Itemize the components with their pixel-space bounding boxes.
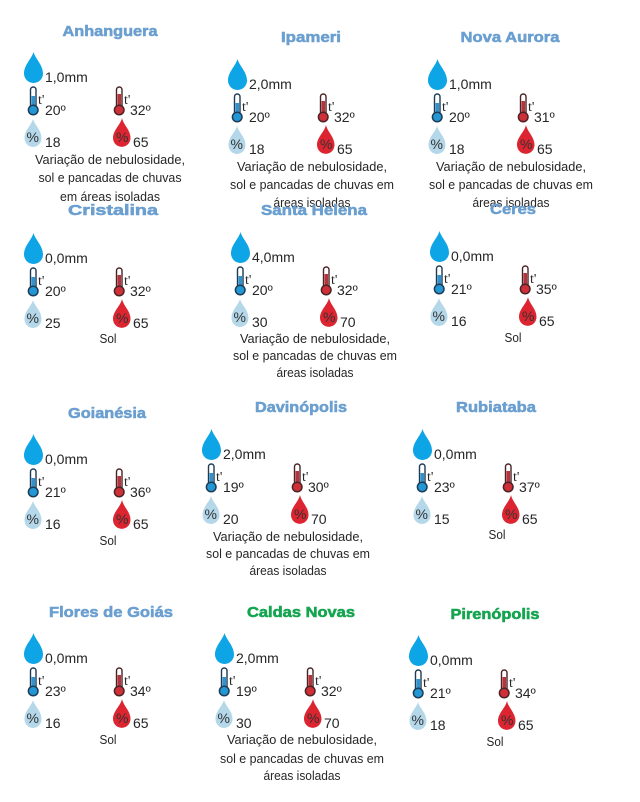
title: Rubiataba: Rubiataba bbox=[456, 400, 537, 416]
weather metrics: Santa Helena: 20º bbox=[252, 282, 273, 298]
title: Pirenópolis: Pirenópolis bbox=[450, 607, 540, 623]
weather metrics: Cristalina: 32º bbox=[130, 283, 151, 299]
weather metrics: Ipameri: 20º bbox=[249, 109, 270, 125]
weather metrics: Flores de Goiás: 0,0mm bbox=[45, 650, 88, 666]
weather metrics: Santa Helena: 30 bbox=[252, 314, 268, 330]
weather metrics: Davinópolis: 20 bbox=[223, 511, 239, 527]
weather metrics: Caldas Novas: 30 bbox=[236, 715, 252, 731]
weather metrics: Goianésia: 36º bbox=[130, 484, 151, 500]
panel: Santa Helena bbox=[231, 203, 397, 380]
weather metrics: Pirenópolis: % bbox=[501, 712, 513, 728]
weather metrics: Rubiataba: 65 bbox=[522, 511, 538, 527]
weather metrics: Ipameri: 32º bbox=[334, 109, 355, 125]
description: Ceres: Sol bbox=[504, 331, 522, 345]
weather metrics: Pirenópolis: % bbox=[412, 712, 424, 728]
title: Goianésia: Goianésia bbox=[68, 406, 147, 422]
weather metrics: Ipameri: % bbox=[320, 136, 332, 152]
panel: Davinópolis bbox=[202, 400, 370, 578]
panel: Caldas Novas bbox=[215, 605, 384, 783]
weather metrics: Rubiataba: % bbox=[505, 506, 517, 522]
weather metrics: Rubiataba: t' bbox=[513, 470, 519, 485]
weather metrics: Rubiataba: 0,0mm bbox=[434, 446, 477, 462]
weather metrics: Goianésia: 0,0mm bbox=[45, 451, 88, 467]
weather metrics: Caldas Novas: % bbox=[307, 710, 319, 726]
description: Santa Helena: áreas isoladas bbox=[276, 366, 354, 380]
weather metrics: Anhanguera: % bbox=[116, 129, 128, 145]
weather metrics: Santa Helena: % bbox=[323, 309, 335, 325]
weather metrics: Davinópolis: 19º bbox=[223, 479, 244, 495]
description: Ipameri: sol e pancadas de chuvas em bbox=[230, 178, 394, 192]
weather metrics: Anhanguera: % bbox=[26, 129, 39, 145]
panel: Rubiataba bbox=[413, 400, 540, 542]
weather metrics: Davinópolis: 70 bbox=[311, 511, 327, 527]
description: Caldas Novas: áreas isoladas bbox=[264, 769, 340, 783]
description: Goianésia: Sol bbox=[100, 534, 116, 548]
weather metrics: Goianésia: % bbox=[116, 511, 128, 527]
weather metrics: Santa Helena: 32º bbox=[337, 282, 358, 298]
weather metrics: Ipameri: 18 bbox=[249, 141, 265, 157]
title: Ipameri: Ipameri bbox=[281, 30, 341, 46]
weather metrics: Davinópolis: % bbox=[204, 506, 217, 522]
title: Davinópolis: Davinópolis bbox=[255, 400, 347, 416]
weather metrics: Nova Aurora: t' bbox=[528, 100, 534, 115]
description: Anhanguera: em áreas isoladas bbox=[60, 190, 160, 204]
weather metrics: Flores de Goiás: 34º bbox=[130, 683, 151, 699]
weather metrics: Ipameri: t' bbox=[328, 100, 334, 115]
weather metrics: Goianésia: 21º bbox=[45, 484, 66, 500]
weather metrics: Ceres: t' bbox=[530, 272, 536, 287]
description: Santa Helena: Variação de nebulosidade, bbox=[240, 332, 390, 346]
weather metrics: Rubiataba: t' bbox=[427, 470, 433, 485]
description: Nova Aurora: sol e pancadas de chuvas em bbox=[429, 178, 593, 192]
weather metrics: Cristalina: % bbox=[26, 310, 39, 326]
weather metrics: Anhanguera bbox=[24, 52, 151, 150]
weather metrics: Caldas Novas: % bbox=[218, 710, 230, 726]
weather metrics: Nova Aurora: 65 bbox=[537, 141, 553, 157]
weather metrics: Ipameri: 65 bbox=[337, 141, 353, 157]
weather metrics: Ipameri bbox=[228, 59, 355, 157]
weather metrics: Anhanguera: 1,0mm bbox=[45, 69, 88, 85]
weather metrics: Pirenópolis: 34º bbox=[515, 685, 536, 701]
title: Cristalina: Cristalina bbox=[68, 203, 159, 219]
weather metrics: Rubiataba: % bbox=[416, 506, 428, 522]
description: Anhanguera: Variação de nebulosidade, bbox=[35, 153, 185, 167]
panel: Nova Aurora bbox=[428, 30, 593, 210]
weather metrics: Caldas Novas bbox=[215, 633, 342, 731]
weather metrics: Goianésia: % bbox=[26, 511, 39, 527]
weather metrics: Davinópolis: t' bbox=[302, 470, 308, 485]
weather metrics: Goianésia bbox=[24, 434, 151, 532]
weather metrics: Davinópolis: 30º bbox=[308, 479, 329, 495]
weather metrics: Santa Helena: 4,0mm bbox=[252, 249, 295, 265]
weather metrics: Cristalina: 20º bbox=[45, 283, 66, 299]
weather metrics: Davinópolis bbox=[202, 429, 329, 527]
description: Anhanguera bbox=[35, 153, 185, 204]
weather metrics: Caldas Novas: 19º bbox=[236, 683, 257, 699]
weather metrics: Caldas Novas: 32º bbox=[321, 683, 342, 699]
weather metrics: Santa Helena: % bbox=[234, 309, 246, 325]
weather metrics: Nova Aurora: 18 bbox=[449, 141, 465, 157]
weather metrics: Goianésia: t' bbox=[38, 475, 44, 490]
weather metrics: Santa Helena bbox=[231, 232, 358, 330]
weather metrics: Caldas Novas: 2,0mm bbox=[236, 650, 279, 666]
weather metrics: Flores de Goiás: t' bbox=[124, 674, 130, 689]
weather metrics: Caldas Novas: 70 bbox=[324, 715, 340, 731]
weather metrics: Rubiataba: 15 bbox=[434, 511, 450, 527]
weather metrics: Santa Helena: t' bbox=[245, 273, 251, 288]
weather metrics: Cristalina: t' bbox=[124, 274, 130, 289]
weather metrics: Ceres: t' bbox=[444, 272, 450, 287]
title: Ceres: Ceres bbox=[490, 202, 536, 218]
weather metrics: Santa Helena: t' bbox=[331, 273, 337, 288]
weather metrics: Anhanguera: 32º bbox=[130, 102, 151, 118]
weather metrics: Rubiataba: 37º bbox=[519, 479, 540, 495]
weather metrics: Flores de Goiás: 23º bbox=[45, 683, 66, 699]
description: Nova Aurora: áreas isoladas bbox=[472, 196, 550, 210]
weather metrics: Ceres bbox=[430, 231, 557, 329]
weather metrics: Pirenópolis: 21º bbox=[430, 685, 451, 701]
weather metrics: Pirenópolis: 0,0mm bbox=[430, 652, 473, 668]
weather metrics: Flores de Goiás: 65 bbox=[133, 715, 149, 731]
panel: Anhanguera bbox=[24, 24, 185, 204]
description: Davinópolis: sol e pancadas de chuvas em bbox=[206, 547, 370, 561]
title: Anhanguera: Anhanguera bbox=[62, 24, 159, 40]
description: Davinópolis bbox=[206, 530, 370, 578]
title: Santa Helena: Santa Helena bbox=[261, 203, 368, 219]
title: Nova Aurora: Nova Aurora bbox=[460, 30, 561, 46]
panel: Goianésia bbox=[24, 406, 151, 548]
description: Santa Helena bbox=[233, 332, 397, 380]
weather metrics: Goianésia: 16 bbox=[45, 516, 61, 532]
weather metrics: Ipameri: t' bbox=[242, 100, 248, 115]
weather metrics: Anhanguera: 20º bbox=[45, 102, 66, 118]
weather metrics: Anhanguera: 18 bbox=[45, 134, 61, 150]
weather metrics: Rubiataba bbox=[413, 429, 540, 527]
description: Ipameri: áreas isoladas bbox=[274, 196, 350, 210]
weather metrics: Ceres: 0,0mm bbox=[451, 248, 494, 264]
weather metrics: Santa Helena: 70 bbox=[340, 314, 356, 330]
description: Ipameri: Variação de nebulosidade, bbox=[237, 160, 387, 174]
weather metrics: Cristalina: 0,0mm bbox=[45, 250, 88, 266]
panel: Ipameri bbox=[228, 30, 394, 210]
description: Flores de Goiás: Sol bbox=[100, 733, 116, 747]
weather metrics: Nova Aurora: 31º bbox=[534, 109, 555, 125]
weather metrics: Flores de Goiás: % bbox=[26, 710, 39, 726]
panel: Pirenópolis bbox=[409, 607, 540, 749]
title: Flores de Goiás: Flores de Goiás bbox=[49, 605, 173, 621]
weather metrics: Nova Aurora: % bbox=[430, 136, 443, 152]
weather metrics: Flores de Goiás bbox=[24, 633, 151, 731]
weather metrics: Ceres: % bbox=[522, 308, 534, 324]
description: Davinópolis: Variação de nebulosidade, bbox=[213, 530, 363, 544]
weather metrics: Cristalina: % bbox=[116, 310, 128, 326]
weather metrics: Nova Aurora: t' bbox=[442, 100, 448, 115]
weather metrics: Nova Aurora: 20º bbox=[449, 109, 470, 125]
description: Caldas Novas bbox=[220, 733, 384, 783]
weather metrics: Pirenópolis: t' bbox=[509, 676, 515, 691]
weather metrics: Ceres: 21º bbox=[451, 281, 472, 297]
weather metrics: Anhanguera: 65 bbox=[133, 134, 149, 150]
description: Anhanguera: sol e pancadas de chuvas bbox=[38, 171, 182, 185]
weather metrics: Davinópolis: % bbox=[294, 506, 306, 522]
weather metrics: Flores de Goiás: 16 bbox=[45, 715, 61, 731]
weather metrics: Pirenópolis bbox=[409, 635, 536, 733]
weather metrics: Flores de Goiás: % bbox=[116, 710, 128, 726]
weather metrics: Cristalina: t' bbox=[38, 274, 44, 289]
description: Ipameri bbox=[230, 160, 394, 210]
weather metrics: Goianésia: t' bbox=[124, 475, 130, 490]
weather metrics: Nova Aurora: 1,0mm bbox=[449, 76, 492, 92]
weather metrics: Ceres: % bbox=[432, 308, 445, 324]
description: Cristalina: Sol bbox=[100, 332, 116, 346]
weather metrics: Goianésia: 65 bbox=[133, 516, 149, 532]
weather metrics: Ipameri: % bbox=[230, 136, 243, 152]
weather metrics: Caldas Novas: t' bbox=[229, 674, 235, 689]
description: Davinópolis: áreas isoladas bbox=[250, 564, 326, 578]
weather metrics: Ipameri: 2,0mm bbox=[249, 76, 292, 92]
weather metrics: Flores de Goiás: t' bbox=[38, 674, 44, 689]
weather metrics: Ceres: 35º bbox=[536, 281, 557, 297]
description: Santa Helena: sol e pancadas de chuvas em bbox=[233, 349, 397, 363]
weather metrics: Cristalina: 25 bbox=[45, 315, 61, 331]
description: Nova Aurora bbox=[429, 160, 593, 210]
description: Nova Aurora: Variação de nebulosidade, bbox=[436, 160, 586, 174]
description: Pirenópolis: Sol bbox=[486, 735, 504, 749]
panel: Cristalina bbox=[24, 203, 159, 346]
weather metrics: Ceres: 65 bbox=[539, 313, 555, 329]
panel: Ceres bbox=[430, 202, 557, 345]
weather metrics: Anhanguera: t' bbox=[38, 93, 44, 108]
weather metrics: Anhanguera: t' bbox=[124, 93, 130, 108]
weather metrics: Nova Aurora: % bbox=[520, 136, 532, 152]
description: Caldas Novas: Variação de nebulosidade, bbox=[227, 733, 377, 747]
weather metrics: Pirenópolis: 18 bbox=[430, 717, 446, 733]
description: Rubiataba: Sol bbox=[488, 528, 506, 542]
description: Caldas Novas: sol e pancadas de chuvas em bbox=[220, 752, 384, 766]
weather metrics: Cristalina bbox=[24, 233, 151, 331]
weather metrics: Cristalina: 65 bbox=[133, 315, 149, 331]
weather metrics: Pirenópolis: t' bbox=[423, 676, 429, 691]
weather metrics: Davinópolis: t' bbox=[216, 470, 222, 485]
weather metrics: Rubiataba: 23º bbox=[434, 479, 455, 495]
weather metrics: Davinópolis: 2,0mm bbox=[223, 446, 266, 462]
weather metrics: Caldas Novas: t' bbox=[315, 674, 321, 689]
weather metrics: Pirenópolis: 65 bbox=[518, 717, 534, 733]
panel: Flores de Goiás bbox=[24, 605, 173, 747]
weather metrics: Nova Aurora bbox=[428, 59, 555, 157]
title: Caldas Novas: Caldas Novas bbox=[247, 605, 355, 621]
weather metrics: Ceres: 16 bbox=[451, 313, 467, 329]
